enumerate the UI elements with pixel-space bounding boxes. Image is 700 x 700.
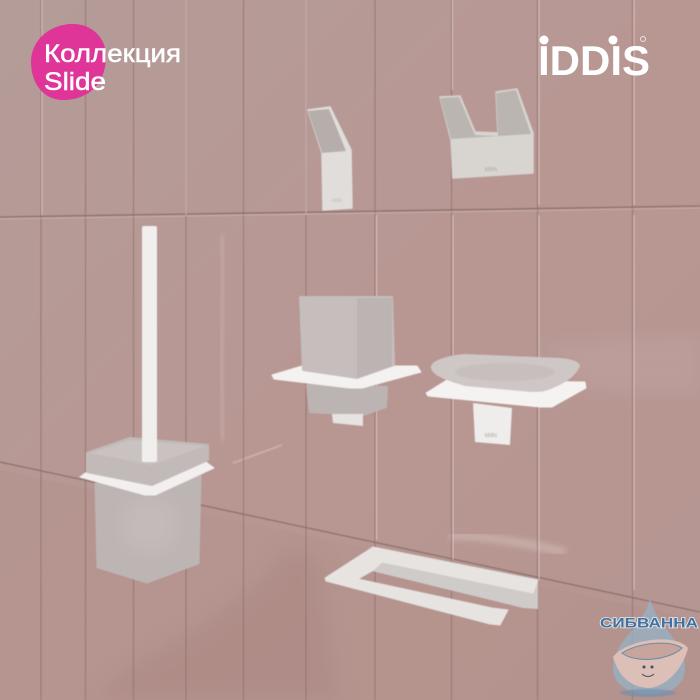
bath	[613, 639, 688, 688]
bottom caption blur	[620, 689, 676, 697]
holder frame	[325, 547, 538, 625]
shelf plate	[272, 366, 421, 388]
wall plate	[372, 562, 538, 609]
bracket	[473, 403, 512, 445]
upper glass	[87, 438, 208, 485]
paper towel holder	[325, 547, 538, 625]
wall hook single: iddis	[332, 198, 343, 204]
bracket	[332, 414, 363, 426]
lower cup	[307, 385, 387, 415]
watermark text: СИБВАННА	[600, 614, 698, 630]
soap dish: iddis	[485, 433, 497, 439]
logo iddis: IDDIS	[538, 37, 650, 84]
toilet brush holder	[80, 226, 214, 582]
soap dish	[426, 354, 586, 445]
water drop	[613, 597, 685, 694]
shelf plate	[426, 380, 586, 407]
wall hook double	[440, 89, 533, 178]
face	[642, 666, 654, 676]
dish	[431, 354, 580, 392]
collection title: Коллекция	[44, 40, 181, 68]
wall hook double: iddis	[485, 167, 497, 173]
brush handle	[142, 226, 157, 462]
white ring	[80, 462, 214, 495]
collection badge	[31, 24, 181, 100]
watermark sibvanna	[600, 597, 698, 697]
wall hook single	[308, 107, 352, 210]
pink circle	[31, 24, 106, 100]
glass cup holder	[272, 297, 421, 426]
collection title: Slide	[44, 68, 106, 96]
lower glass	[96, 476, 200, 582]
cup	[300, 297, 394, 378]
